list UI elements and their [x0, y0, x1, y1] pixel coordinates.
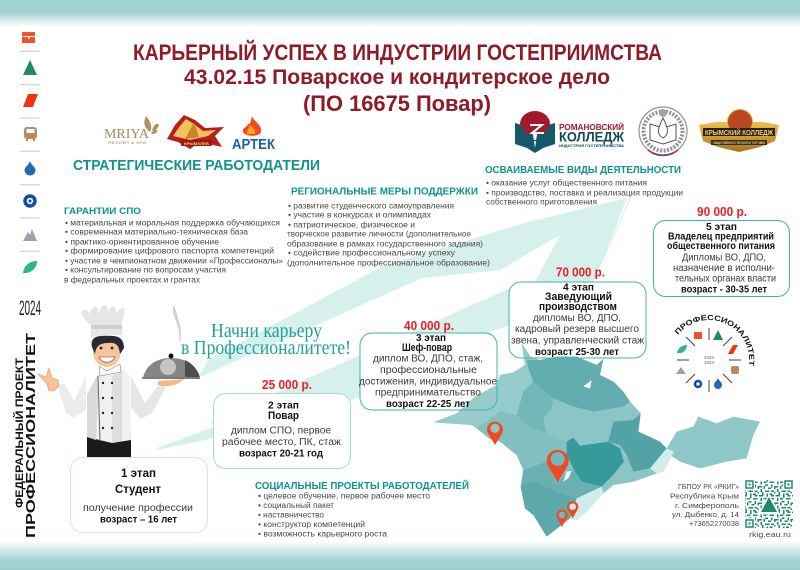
panel: SPO guarantees	[64, 206, 284, 284]
panel: mastered activities: • производство, поставка и реализация продукции	[486, 188, 683, 197]
panel: mastered activities: собственного приготовления	[486, 198, 597, 207]
stage 4 card: звена, управленческий стаж	[511, 336, 644, 346]
panel: SPO guarantees: • современная материально-техническая база	[65, 228, 249, 237]
vertical project title: ПРОФЕССИОНАЛИТЕТ	[24, 332, 38, 538]
chef trousers	[87, 436, 131, 457]
icon: green leaf	[23, 261, 37, 273]
title: КАРЬЕРНЫЙ УСПЕХ В ИНДУСТРИИ ГОСТЕПРИИМСТВА	[133, 40, 662, 65]
slogan	[181, 320, 351, 359]
panel: employer social projects: • возможность карьерного роста	[258, 530, 388, 539]
stage 2 card: диплом СПО, первое	[231, 426, 331, 436]
chef jacket	[87, 365, 131, 443]
panel: employer social projects	[255, 479, 469, 539]
panel: employer social projects: СОЦИАЛЬНЫЕ ПРОЕКТЫ РАБОТОДАТЕЛЕЙ	[255, 479, 469, 492]
stage 2 card: возраст 20-21 год	[239, 448, 324, 460]
QR code	[745, 480, 793, 528]
career arrow	[157, 197, 631, 450]
panel: SPO guarantees: • практико-ориентированное обучение	[65, 237, 220, 246]
stage 3 card: профессиональные	[380, 364, 477, 376]
logo: Romanovsky College	[515, 111, 625, 153]
stage 2 card	[214, 377, 350, 468]
stage 3 card: достижения, индивидуальное	[359, 376, 497, 387]
map pin: Alushta	[567, 501, 578, 518]
panel: SPO guarantees: • материальная и моральная поддержка обучающихся	[65, 218, 280, 227]
stage 3 card: 40 000 р.	[404, 318, 454, 333]
stage 1 card: Студент	[115, 482, 161, 496]
stage 5 card: тельных органах власти	[675, 274, 776, 284]
panel: SPO guarantees: ГАРАНТИИ СПО	[64, 206, 141, 217]
Professionalitet badge: 2024	[704, 355, 714, 360]
panel: employer social projects: • социальный пакет	[258, 501, 334, 510]
panel: employer social projects: • целевое обучение, первое рабочее место	[258, 492, 431, 501]
stage 5 card: 5 этап	[706, 222, 737, 233]
college address: г. Симферополь	[675, 501, 739, 510]
stage 4 card: 70 000 р.	[556, 264, 605, 280]
map pin: Simferopol	[547, 450, 569, 482]
college address	[670, 482, 739, 528]
stage 3 card	[359, 318, 497, 410]
stage 4 card: дипломы ВО, ДПО,	[533, 313, 621, 324]
vertical project title: ФЕДЕРАЛЬНЫЙ ПРОЕКТ	[13, 358, 26, 508]
title	[133, 40, 662, 116]
logo: Artek	[232, 116, 276, 153]
slogan: в Профессионалитете!	[181, 337, 351, 359]
stage 5 card: возраст - 30-35 лет	[681, 285, 767, 296]
college address: ул. Дыбенко, д. 14	[672, 510, 739, 519]
map of Crimea	[433, 343, 760, 537]
stage 2 card: Повар	[268, 410, 299, 422]
stage 3 card: Шеф-повар	[402, 342, 452, 354]
logo: Krymkhleb	[167, 115, 224, 149]
college address: ГБПОУ РК «РКИГ»	[678, 482, 739, 491]
panel: regional support: • участие в конкурсах и олимпиадах	[288, 211, 431, 220]
panel: SPO guarantees: в федеральных проектах и грантах	[64, 275, 200, 284]
stage 1 card: получение профессии	[83, 502, 193, 514]
stage 3 card: 3 этап	[416, 333, 446, 344]
title: (ПО 16675 Повар)	[303, 91, 491, 116]
logo: Mriya: MRIYA	[104, 127, 150, 142]
Professionalitet badge	[674, 314, 754, 392]
map pin: Yalta	[556, 509, 568, 527]
stage 5 card: общественного питания	[667, 240, 775, 252]
panel: regional support: РЕГИОНАЛЬНЫЕ МЕРЫ ПОДДЕРЖКИ	[291, 186, 478, 198]
panel: regional support: • патриотическое, физическое и	[288, 220, 415, 229]
panel: SPO guarantees: • формирование цифрового паспорта компетенций	[65, 247, 274, 256]
college address: Республика Крым	[670, 492, 739, 500]
stage 4 card: производством	[539, 301, 617, 313]
top band	[0, 0, 800, 27]
icon: blue ring	[25, 196, 35, 206]
cloche	[143, 358, 200, 378]
panel: mastered activities	[485, 164, 683, 207]
chef hand gesture	[38, 368, 59, 391]
stage 1 card: 1 этап	[121, 466, 156, 480]
left icon column	[20, 32, 40, 273]
panel: SPO guarantees: • консультирование по вопросам участия	[65, 266, 226, 275]
icon: blue drop	[24, 161, 36, 176]
stage 3 card: предпринимательство	[375, 388, 481, 398]
college address: +73652270038	[689, 519, 739, 528]
panel: regional support: • развитие студенческого самоуправления	[288, 201, 454, 210]
stage 5 card: назначение в исполни-	[673, 263, 775, 274]
panel: employer social projects: • конструктор компетенций	[258, 520, 365, 529]
stage 4 card: 4 этап	[563, 282, 594, 294]
map pin: Sevastopol side	[487, 422, 503, 445]
logo: Artek: АРТЕК	[232, 136, 276, 153]
icon: red parallelogram	[23, 94, 38, 107]
title: 43.02.15 Поварское и кондитерское дело	[184, 66, 610, 89]
chef collar	[99, 364, 121, 376]
chef hat	[82, 305, 125, 338]
panel: employer social projects: • наставничество	[258, 511, 325, 520]
stage 5 card: Владелец предприятий	[668, 231, 774, 242]
Professionalitet badge: 2024	[704, 360, 714, 365]
chef arms	[57, 376, 86, 418]
vertical project title	[13, 332, 38, 538]
stage 1 card	[70, 458, 208, 532]
logo: Krymkhleb: КРЫМХЛЕБ	[184, 141, 209, 146]
stage 2 card: рабочее место, ПК, стаж	[222, 436, 341, 448]
logo: Mriya: RESORT & SPA	[108, 141, 147, 145]
stage 5 card: Дипломы ВО, ДПО,	[682, 252, 766, 264]
slogan: Начни карьеру	[211, 320, 322, 342]
panel: mastered activities: ОСВАИВАЕМЫЕ ВИДЫ ДЕЯТЕЛЬНОСТИ	[485, 164, 681, 176]
stage 4 card: Заведующий	[545, 291, 612, 303]
infographic canvas: 2024	[19, 297, 41, 320]
stage 3 card: диплом ВО, ДПО, стаж,	[373, 354, 483, 364]
stage 1 card: возраст – 16 лет	[100, 514, 177, 526]
logo: state emblem	[639, 107, 687, 156]
stage 4 card: возраст 25-30 лет	[535, 347, 619, 358]
stage 2 card: 25 000 р.	[262, 377, 312, 392]
icon: grey mountain	[23, 229, 37, 241]
panel: mastered activities: • оказание услуг общественного питания	[486, 179, 647, 188]
illustration: chef with cloche	[38, 305, 200, 457]
icon: orange chest	[22, 32, 35, 43]
stage 5 card: 90 000 р.	[697, 204, 747, 219]
steam	[173, 306, 180, 342]
logo: Crimean College: КРЫМСКИЙ КОЛЛЕДЖ	[705, 128, 774, 137]
stage 5 card	[654, 204, 790, 296]
logo: Romanovsky College: ИНДУСТРИЯ ГОСТЕПРИИМСТВА	[559, 144, 625, 148]
logo: Romanovsky College: РОМАНОВСКИЙ	[559, 123, 624, 132]
panel: regional support	[287, 186, 490, 267]
chef hand with plate	[158, 379, 184, 386]
panel: regional support: • содействие профессиональному успеху	[288, 249, 455, 258]
panel: SPO guarantees: • участие в чемпионатном движении «Профессионалы»	[65, 256, 284, 265]
chef buttons	[102, 382, 113, 429]
chef head	[93, 335, 121, 367]
stage 4 card: кадровый резерв высшего	[515, 324, 639, 335]
panel: regional support: творческое развитие личности (дополнительное	[287, 230, 472, 239]
panel: regional support: образование в рамках государственного задания)	[287, 239, 483, 248]
stage 4 card	[509, 264, 646, 358]
logo: Mriya	[104, 116, 159, 145]
website: rkig.eau.ru	[749, 530, 791, 539]
logo: Crimean College	[699, 110, 779, 152]
bottom band	[0, 541, 800, 570]
stage 3 card: возраст 22-25 лет	[386, 399, 470, 410]
stage 2 card: 2 этап	[268, 400, 299, 412]
icon: bus	[24, 127, 37, 141]
Professionalitet badge: ПРОФЕССИОНАЛИТЕТ	[674, 314, 754, 366]
logo: Romanovsky College: КОЛЛЕДЖ	[559, 128, 624, 144]
heading: strategic employers: СТРАТЕГИЧЕСКИЕ РАБОТОДАТЕЛИ	[73, 157, 320, 174]
panel: regional support: (дополнительное профессиональное образование)	[287, 258, 490, 267]
icon: green tent	[23, 60, 37, 75]
logo: Crimean College: ОБЩЕСТВЕННОГО ПИТАНИЯ И ТОРГОВЛИ	[713, 141, 765, 145]
white box backgrounds	[70, 220, 790, 533]
